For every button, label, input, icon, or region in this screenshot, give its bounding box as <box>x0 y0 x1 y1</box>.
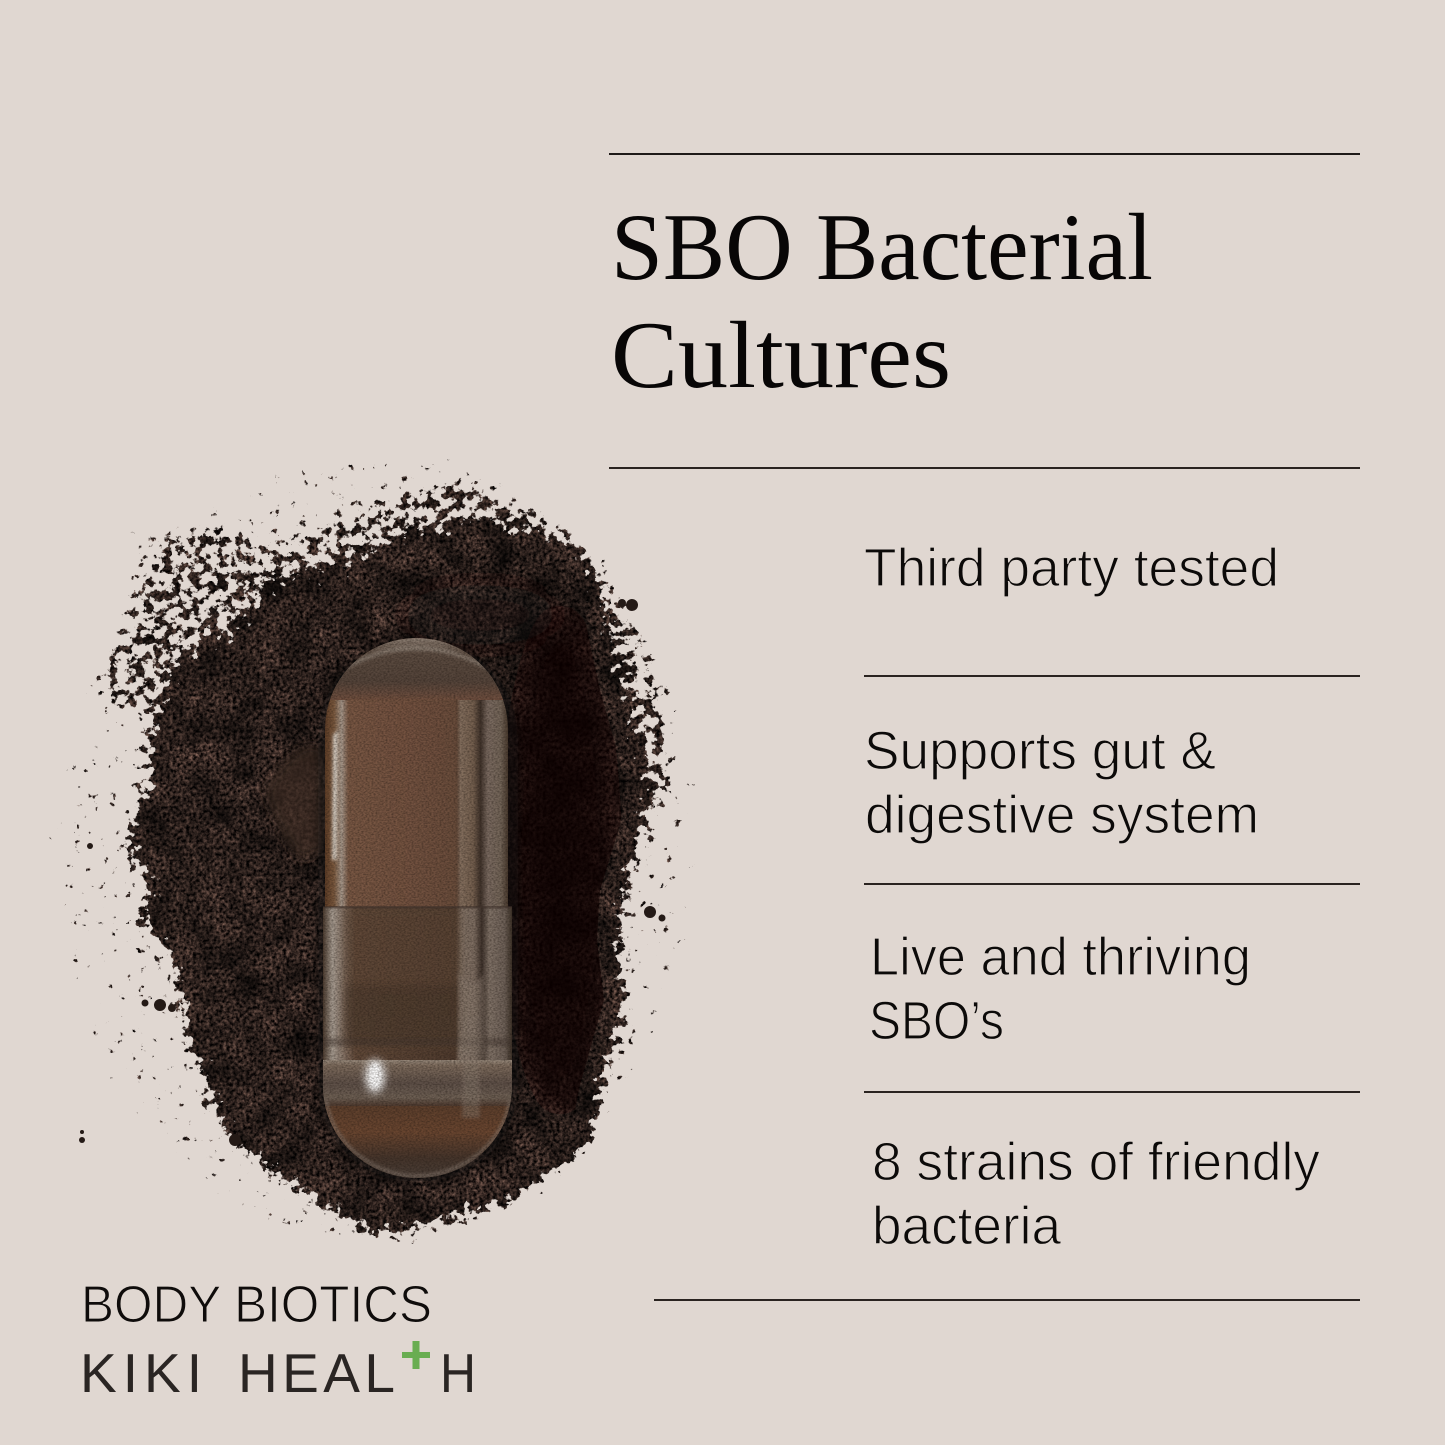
benefit: supports gut and digestive system <box>864 721 1259 845</box>
benefit: 8 strains of friendly bacteria: bacteria <box>872 1196 1062 1256</box>
capsule upper shell <box>325 638 508 907</box>
shadow beside capsule <box>265 585 622 1120</box>
rule above title <box>609 153 1360 155</box>
capsule texture <box>323 638 512 1178</box>
rule under benefit 1 <box>864 675 1360 677</box>
capsule <box>318 638 518 1190</box>
rule under benefit 2 <box>864 883 1360 885</box>
benefit: supports gut and digestive system: Supports gut & <box>864 721 1216 781</box>
icon: green plus <box>402 1341 430 1369</box>
benefit: live and thriving SBOs: SBO’s <box>869 991 1004 1051</box>
capsule base <box>323 1106 512 1180</box>
infographic page <box>49 153 1360 1392</box>
benefit: supports gut and digestive system: digestive system <box>865 785 1259 845</box>
capsule outline sheen <box>323 906 512 908</box>
brand logo: Kiki Health: KIKI <box>80 1342 202 1404</box>
title: Cultures <box>611 302 951 408</box>
dark clump top <box>400 585 560 645</box>
brand logo: Kiki Health: HEAL <box>238 1342 395 1404</box>
title: SBO Bacterial <box>611 194 1153 300</box>
benefit: live and thriving SBOs <box>869 927 1251 1051</box>
benefit: 8 strains of friendly bacteria: 8 strains of friendly <box>872 1132 1320 1192</box>
rule under benefit 3 <box>864 1091 1360 1093</box>
rule under benefit 4 <box>654 1299 1360 1301</box>
title <box>611 194 1153 408</box>
rule below title <box>609 467 1360 469</box>
brand logo: Kiki Health: H <box>440 1342 476 1404</box>
powder pile <box>50 450 700 1250</box>
stray grains <box>79 599 666 1146</box>
capsule lower shell <box>323 907 512 1190</box>
capsule shadow <box>318 640 518 1182</box>
benefit: 8 strains of friendly bacteria <box>872 1132 1320 1256</box>
benefit: third party tested: Third party tested <box>864 538 1279 598</box>
metallic band <box>323 1060 512 1107</box>
brand logo: Kiki Health <box>80 1341 476 1404</box>
product name: BODY BIOTICS <box>81 1276 432 1334</box>
benefit: live and thriving SBOs: Live and thriving <box>870 927 1251 987</box>
pressed flake <box>265 745 325 860</box>
